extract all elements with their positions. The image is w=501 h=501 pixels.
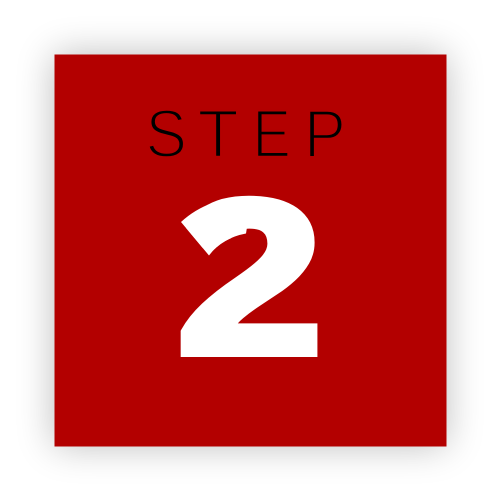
heading: STEP: S bbox=[146, 96, 187, 172]
heading: STEP: T bbox=[198, 97, 239, 172]
heading: STEP bbox=[146, 96, 346, 172]
number 2: 2 bbox=[177, 156, 322, 400]
panel: red square bbox=[54, 54, 446, 446]
heading: STEP: E bbox=[252, 97, 291, 172]
heading: STEP: P bbox=[304, 96, 346, 171]
panel shadow bbox=[54, 54, 446, 446]
